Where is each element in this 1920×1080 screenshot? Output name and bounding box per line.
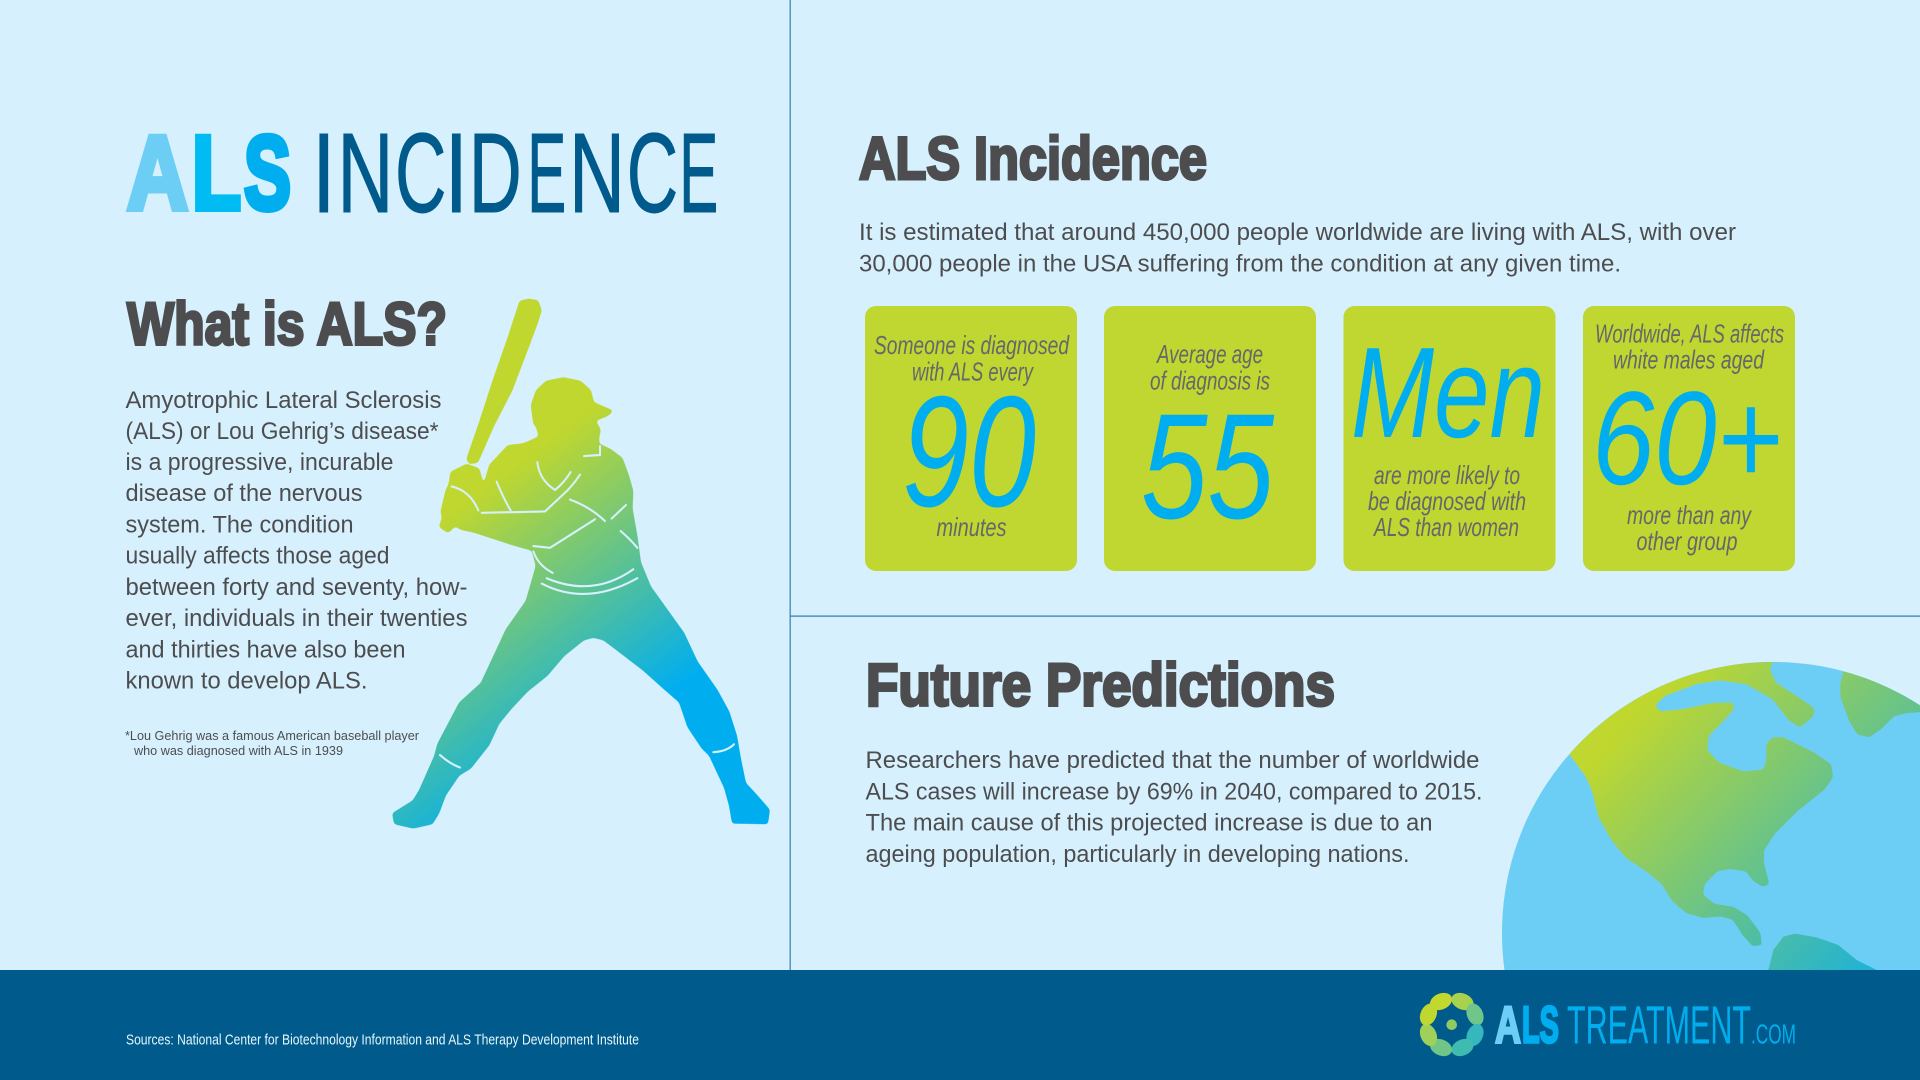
vertical divider — [790, 0, 791, 970]
footer band — [0, 970, 1920, 1080]
stat card: 60+: Worldwide, ALS affects — [1595, 318, 1784, 348]
text block: what is ALS: Amyotrophic Lateral Sclerosis — [126, 387, 442, 414]
stat card: men: ALS than women — [1373, 512, 1519, 542]
logo wordmark: LS — [1522, 996, 1559, 1054]
text block: future predictions: The main cause of this projected increase is due to an — [866, 810, 1432, 836]
title: L — [192, 115, 241, 232]
text block: incidence intro: 30,000 people in the USA suffering from the condition at any given time. — [859, 250, 1621, 278]
uniform creases — [440, 446, 734, 767]
stat card: 90 minutes: minutes — [936, 512, 1006, 542]
globe ocean — [1502, 662, 1920, 970]
stat card: age 55: Average age — [1156, 339, 1263, 369]
text block: what is ALS: and thirties have also been — [126, 636, 406, 664]
stat card: age 55: 55 — [1141, 382, 1274, 550]
stat card: men — [1344, 306, 1556, 571]
title: I — [312, 110, 336, 236]
text block: incidence intro: It is estimated that around 450,000 people worldwide are living with ALS, with over — [859, 219, 1736, 246]
title: C — [627, 110, 678, 236]
logo wordmark: .COM — [1751, 1018, 1796, 1050]
logo mark — [1417, 990, 1487, 1059]
title: C — [395, 110, 446, 236]
stat card: 60+ — [1583, 306, 1795, 571]
logo wordmark: A — [1495, 996, 1521, 1054]
text block: what is ALS: between forty and seventy, how- — [126, 574, 468, 601]
sources: Sources: National Center for Biotechnology Information and ALS Therapy Development Institute — [126, 1032, 639, 1048]
title: I — [444, 110, 468, 236]
footnote — [125, 728, 420, 758]
continents — [1547, 653, 1920, 970]
text block: future predictions — [866, 747, 1482, 868]
title: D — [469, 110, 522, 236]
heading: ALS Incidence: ALS Incidence — [859, 125, 1207, 192]
text block: future predictions: Researchers have predicted that the number of worldwide — [866, 747, 1480, 774]
stat card: 60+: more than any — [1627, 500, 1752, 530]
stat card: 90 minutes: 90 — [902, 364, 1036, 540]
stat card: 60+: white males aged — [1613, 344, 1765, 374]
stat card: men: be diagnosed with — [1368, 486, 1526, 516]
text block: future predictions: ALS cases will increase by 69% in 2040, compared to 2015. — [866, 778, 1482, 806]
text block: what is ALS: is a progressive, incurable — [126, 449, 394, 476]
title: A — [127, 115, 188, 232]
title: E — [679, 110, 718, 236]
heading: What is ALS?: What is ALS? — [127, 290, 447, 358]
stat card: men: are more likely to — [1374, 460, 1520, 490]
text block: what is ALS: known to develop ALS. — [126, 668, 368, 694]
footnote: who was diagnosed with ALS in 1939 — [133, 743, 343, 758]
stat card: 60+: other group — [1636, 526, 1738, 556]
text block: what is ALS: system. The condition — [126, 512, 354, 538]
logo wordmark: TREATMENT — [1567, 996, 1751, 1056]
logo wordmark — [1495, 996, 1796, 1056]
title: N — [569, 110, 625, 236]
text block: what is ALS — [126, 387, 468, 694]
stat card: 90 minutes: with ALS every — [912, 356, 1034, 386]
text block: what is ALS: disease of the nervous — [126, 480, 362, 507]
icon: baseball player silhouette — [392, 299, 770, 829]
logo: ALS Treatment — [1417, 990, 1796, 1059]
footnote: *Lou Gehrig was a famous American baseball player — [125, 728, 420, 743]
title: N — [337, 110, 393, 236]
text block: what is ALS: (ALS) or Lou Gehrig’s disease* — [126, 418, 439, 445]
icon: globe — [1502, 653, 1920, 970]
text block: incidence intro — [859, 219, 1736, 278]
title — [127, 110, 718, 236]
title: S — [244, 115, 291, 232]
text block: what is ALS: ever, individuals in their twenties — [126, 605, 468, 632]
title: E — [527, 110, 566, 236]
bat — [466, 299, 542, 464]
heading: Future Predictions: Future Predictions — [866, 652, 1335, 718]
stat card: 90 minutes — [865, 306, 1077, 571]
stat card: age 55 — [1104, 306, 1316, 571]
stat card: men: Men — [1351, 321, 1545, 465]
text block: future predictions: ageing population, particularly in developing nations. — [866, 841, 1410, 868]
stat card: age 55: of diagnosis is — [1150, 366, 1270, 396]
horizontal divider — [790, 616, 1920, 617]
stat card: 90 minutes: Someone is diagnosed — [874, 330, 1070, 360]
player body — [392, 377, 770, 829]
text block: what is ALS: usually affects those aged — [126, 542, 390, 570]
stat card: 60+: 60+ — [1592, 365, 1782, 513]
